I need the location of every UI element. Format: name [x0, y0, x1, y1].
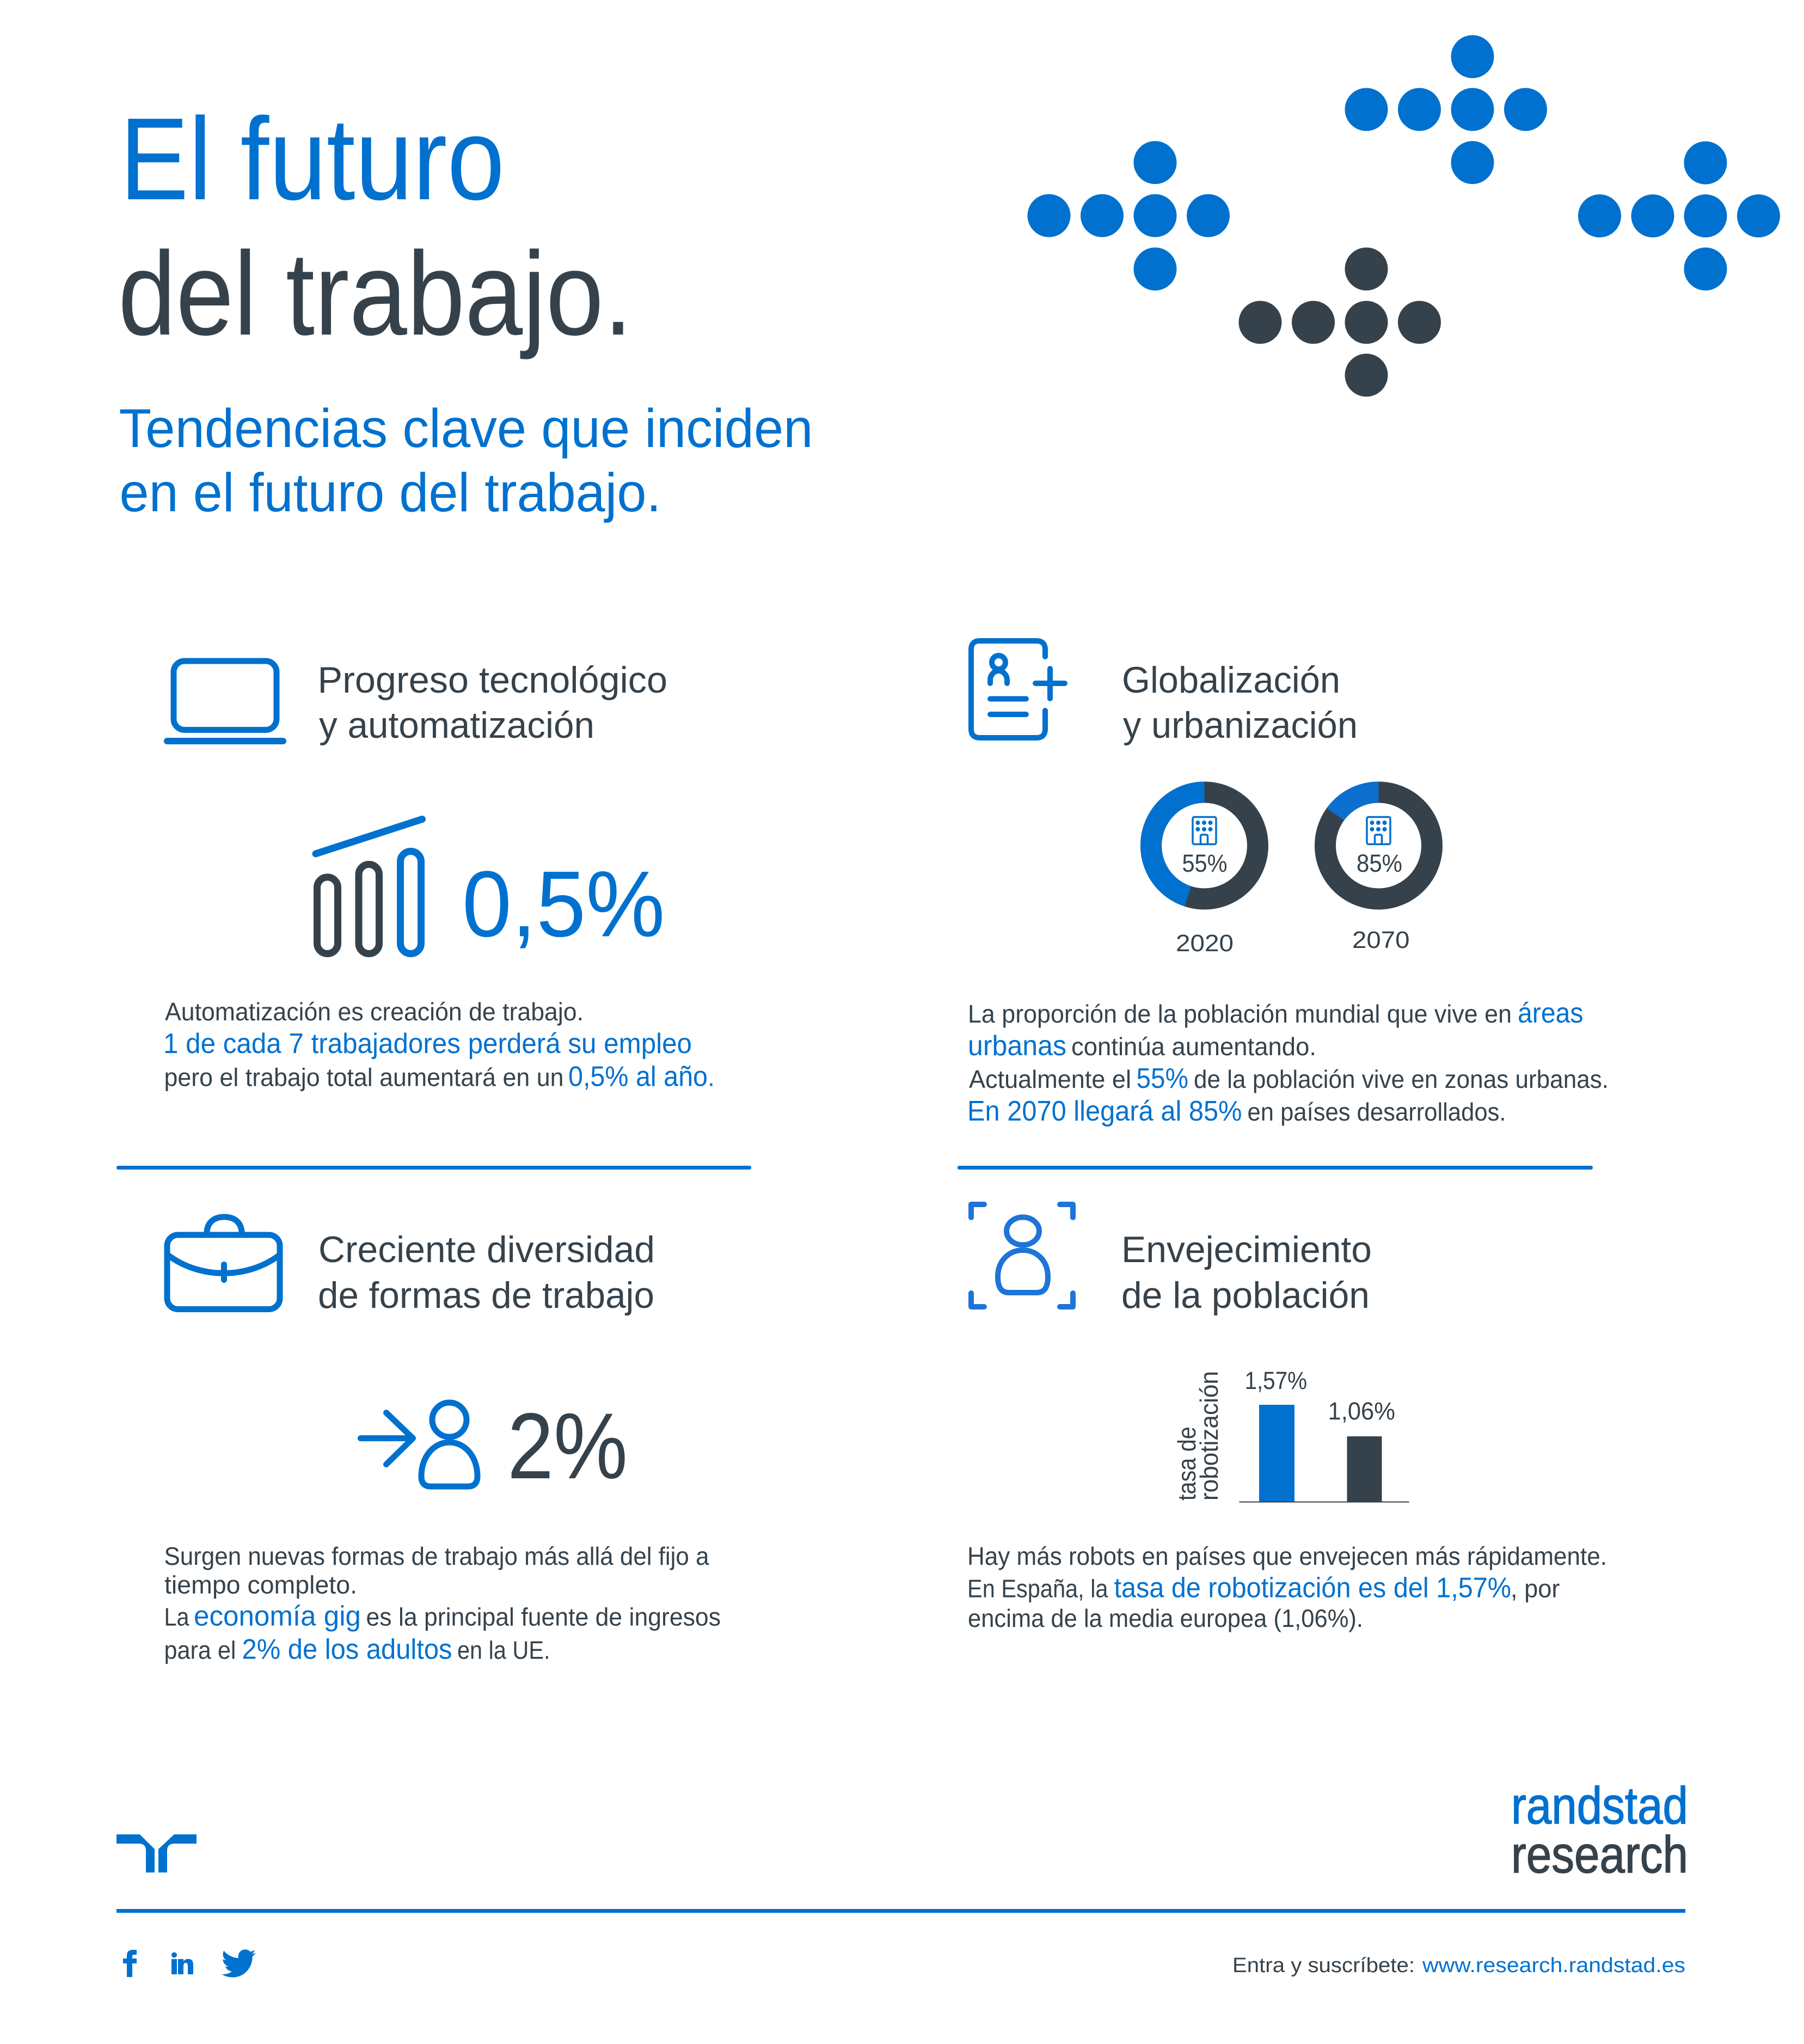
donut chart: 2070 [1325, 792, 1432, 953]
heading: creciente diversidad: de formas de trabajo [318, 1275, 654, 1316]
donut chart: 2020 [1151, 792, 1257, 957]
panel: progreso tecnológico [163, 659, 715, 1092]
heading: creciente diversidad [318, 1229, 655, 1316]
logo: randstad research [1511, 1777, 1688, 1884]
body text: economía gig: La [164, 1603, 189, 1631]
stat: 2%: 2% [507, 1394, 628, 1498]
body text: economía gig: tiempo completo. [164, 1570, 357, 1599]
icon: rising bars [316, 819, 422, 954]
icon: twitter [222, 1949, 256, 1978]
donut chart: 2020: 55% [1182, 849, 1227, 877]
stat: 0,5%: 0,5% [462, 852, 665, 956]
body text: urbanización: de la población vive en zonas urbanas. [1194, 1065, 1609, 1093]
footer subscribe link: www.research.randstad.es [1422, 1954, 1685, 1977]
bar chart: tasa de robotización [1173, 1367, 1409, 1503]
icon: briefcase [167, 1217, 280, 1309]
body text: automatización: 0,5% al año [568, 1061, 708, 1092]
body text: robotización: En España, la [967, 1575, 1108, 1603]
body text: robotización: Hay más robots en países que envejecen más rápidamente. [967, 1542, 1607, 1570]
logo: randstad research: research [1511, 1826, 1688, 1884]
heading: envejecimiento: de la población [1121, 1275, 1370, 1316]
axis label: robotización [1195, 1371, 1223, 1501]
body text: economía gig: 2% de los adultos [242, 1633, 452, 1665]
panel: envejecimiento [967, 1204, 1607, 1632]
title [118, 93, 633, 360]
body text: economía gig: economía gig [194, 1601, 361, 1632]
logo: randstad symbol [116, 1834, 197, 1872]
body text: robotización: tasa de robotización es del 1,57% [1114, 1572, 1511, 1604]
panel: diversidad de formas de trabajo [164, 1217, 721, 1665]
body text: urbanización: En 2070 llegará al 85% [967, 1096, 1242, 1127]
logo: randstad research: randstad [1511, 1777, 1688, 1835]
heading: globalización [1122, 659, 1358, 746]
body text: urbanización: continúa aumentando. [1071, 1032, 1316, 1061]
heading: globalización: Globalización [1122, 659, 1340, 701]
icon: arrow into person [360, 1403, 477, 1486]
icon: document with person and plus [971, 641, 1065, 738]
body text: economía gig: para el [164, 1636, 236, 1664]
heading: envejecimiento [1121, 1229, 1372, 1316]
icon: building [1367, 817, 1390, 844]
body text: robotización: , por [1511, 1575, 1560, 1603]
body text: automatización: Automatización es creación de trabajo. [165, 997, 584, 1026]
heading: progreso tecnológico: y automatización [319, 705, 594, 746]
donut chart: 2070: 85% [1357, 849, 1402, 877]
footer subscribe link [1232, 1954, 1685, 1977]
social icons [123, 1949, 256, 1978]
body text: economía gig: Surgen nuevas formas de trabajo más allá del fijo a [164, 1542, 709, 1570]
title: El futuro [120, 93, 505, 224]
body text: urbanización [967, 997, 1609, 1127]
subtitle: en el futuro del trabajo. [120, 462, 661, 523]
axis label: tasa de [1173, 1427, 1201, 1501]
body text: urbanización: 55% [1137, 1063, 1188, 1094]
body text: urbanización: urbanas [968, 1030, 1066, 1062]
icon: laptop [167, 661, 283, 741]
icon: facebook [123, 1950, 137, 1977]
subtitle: Tendencias clave que inciden [119, 398, 813, 459]
body text: economía gig: en la UE. [457, 1636, 550, 1664]
footer subscribe link: Entra y suscríbete: [1232, 1954, 1415, 1977]
body text: automatización: 1 de cada 7 trabajadores perderá su empleo [163, 1028, 692, 1060]
bar chart: tasa de robotización: 1,06% [1328, 1397, 1395, 1425]
decorative dot crosses [1028, 35, 1780, 396]
axis label [1173, 1371, 1223, 1501]
subtitle [119, 398, 813, 523]
body text: automatización: pero el trabajo total aumentará en un [164, 1063, 564, 1091]
body text: urbanización: Actualmente el [969, 1065, 1131, 1093]
body text: robotización [967, 1542, 1607, 1632]
body text: automatización: . [708, 1063, 715, 1091]
body text: urbanización: en países desarrollados. [1248, 1098, 1506, 1126]
panel: globalización [967, 641, 1609, 1127]
bar chart: tasa de robotización: 1,57% [1244, 1367, 1307, 1394]
heading: globalización: y urbanización [1123, 705, 1358, 746]
body text: urbanización: La proporción de la población mundial que vive en [968, 1000, 1512, 1028]
donut chart: 2070: 2070 [1352, 927, 1410, 953]
icon: linkedin [171, 1953, 193, 1974]
body text: economía gig: es la principal fuente de ingresos [366, 1603, 721, 1631]
body text: urbanización: áreas [1518, 997, 1583, 1029]
icon: person in focus frame [971, 1204, 1073, 1307]
heading: progreso tecnológico: Progreso tecnológico [318, 659, 667, 701]
body text: economía gig [164, 1542, 721, 1665]
heading: envejecimiento: Envejecimiento [1121, 1229, 1372, 1270]
icon: building [1193, 817, 1216, 844]
donut chart: 2020: 2020 [1176, 930, 1234, 957]
body text: automatización [163, 997, 715, 1092]
heading: creciente diversidad: Creciente diversidad [318, 1229, 655, 1270]
title: del trabajo. [118, 228, 633, 360]
heading: progreso tecnológico [318, 659, 667, 746]
body text: robotización: encima de la media europea (1,06%). [968, 1604, 1363, 1632]
